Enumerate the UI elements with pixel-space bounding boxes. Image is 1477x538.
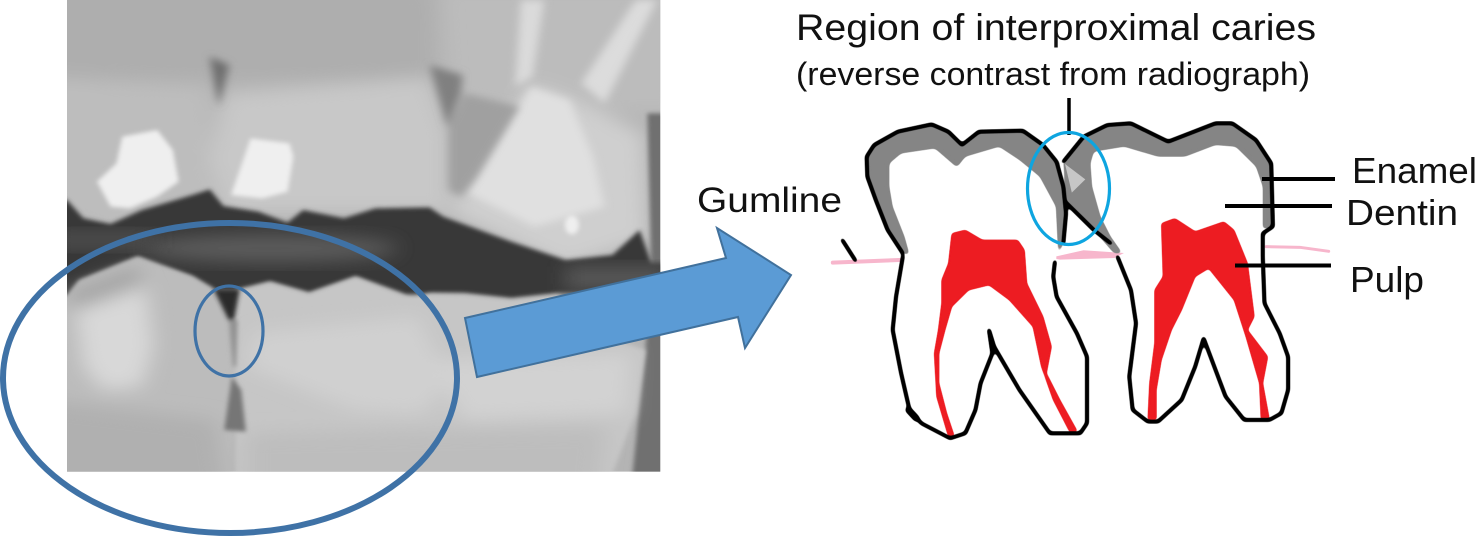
arrow: radiograph to diagram — [465, 228, 791, 377]
dark occlusal gap — [44, 189, 682, 302]
label: gumline: Gumline — [697, 181, 842, 220]
small ellipse: caries in radiograph — [195, 286, 263, 376]
caries leader line — [1067, 98, 1071, 135]
gum lines — [833, 247, 1329, 263]
right dark strip — [630, 110, 660, 472]
tooth diagram — [833, 123, 1329, 438]
large ellipse: lower molars region — [3, 223, 457, 533]
caries highlight ellipse — [1028, 132, 1110, 244]
pulp: both teeth — [934, 218, 1270, 437]
heading: region of interproximal caries: Region of interproximal caries — [796, 7, 1316, 48]
upper interdental dark gaps — [210, 57, 519, 197]
dentin leader line — [1225, 204, 1332, 208]
tooth outlines — [842, 123, 1288, 438]
enamel: both teeth — [867, 123, 1273, 255]
interproximal wedges — [214, 289, 246, 432]
pulp leader line — [1235, 264, 1331, 268]
lower teeth — [67, 255, 648, 472]
upper teeth shading — [44, 0, 682, 267]
subheading: reverse contrast: (reverse contrast from radiograph) — [796, 56, 1310, 92]
label: dentin: Dentin — [1346, 192, 1458, 233]
label: pulp: Pulp — [1350, 259, 1424, 300]
caries lesion — [1065, 164, 1085, 193]
fillings — [97, 130, 579, 234]
enamel leader line — [1262, 177, 1335, 181]
dental radiograph — [67, 0, 660, 472]
label: enamel: Enamel — [1352, 150, 1477, 191]
